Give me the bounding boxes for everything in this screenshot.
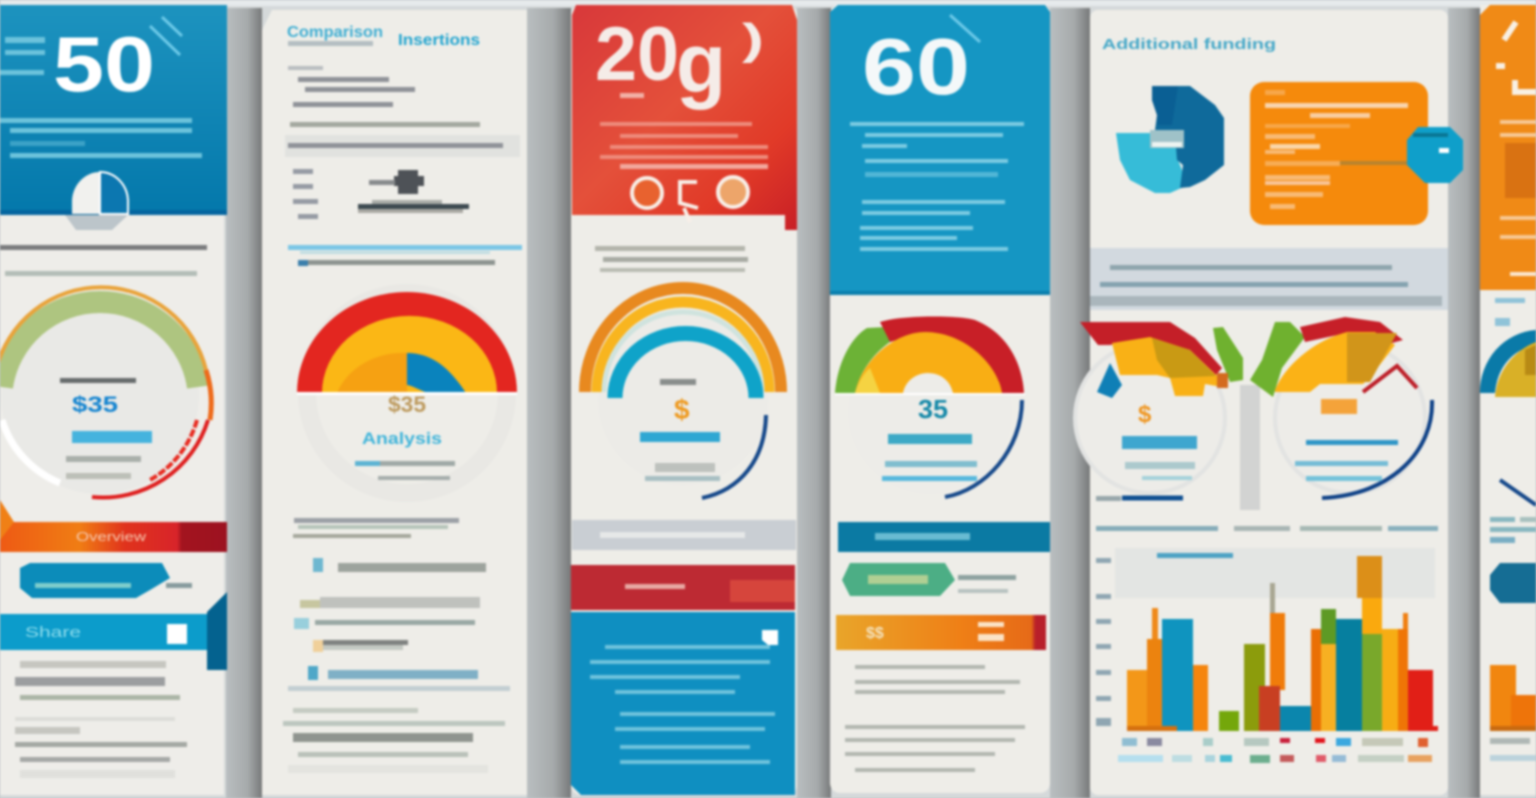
big number: 50 [53,20,155,108]
icon: half circle [65,172,128,230]
footer lines [590,645,775,764]
panel: column 4 [830,5,1050,793]
section divider blue [288,245,522,266]
gauge caption [640,432,720,442]
text line [288,143,503,148]
grey band with lines [1090,248,1448,310]
gauge value: $ [1138,401,1152,428]
header: blue block [0,5,227,215]
gauge value: 35 [918,394,948,424]
gauge [835,316,1025,497]
text lines [1490,517,1536,543]
grey strip [285,135,520,157]
gauge value [1321,399,1357,414]
bars [1147,639,1162,731]
divider between gauges [1240,385,1260,510]
banner: orange red: Overview [76,529,147,544]
gauge: partial [1480,330,1536,505]
panel: column 6 [1480,5,1536,795]
gauge: rings [585,288,781,498]
connector [1340,161,1410,165]
callout: orange [1250,82,1463,225]
bar chart [1096,548,1438,763]
big number: 60 [862,22,970,111]
gauge caption [888,434,972,444]
panel: column 2: Insertions [398,32,480,49]
chart: pie [1116,86,1224,193]
darker header block [1505,143,1536,198]
banner: orange red [0,500,227,552]
banner: red [571,565,795,610]
banner: blue [838,522,1050,552]
chart: small silhouette [293,169,469,219]
header lines [1500,120,1536,276]
list items [288,558,510,691]
big year: g [676,16,726,110]
gauge value: $ [674,394,690,425]
x axis labels row 1 [1122,738,1428,747]
icon: blue circle [1407,127,1463,183]
gauge: left [1075,322,1243,501]
panel: column 1 [0,5,227,795]
header lines [850,122,1024,251]
gauge caption: Analysis [362,429,442,448]
gauge: right [1250,317,1432,498]
heading: Additional funding [1102,36,1276,53]
icon: signal [150,17,182,55]
text lines [293,518,459,538]
text lines [288,41,480,127]
top page strip [0,0,1536,6]
footer: blue [571,612,795,795]
gauge: rainbow [297,292,517,493]
header lines [600,93,768,169]
gauge caption [1306,440,1398,445]
axis labels [1096,558,1111,726]
pill: blue [1490,563,1536,603]
panel: column 2 [262,10,527,795]
big year [595,12,764,110]
pill: blue [20,563,192,598]
banner: blue [0,592,227,670]
text lines [1495,298,1525,326]
icon: note [762,630,778,645]
icon: signal [950,15,980,42]
divider lines [1096,526,1438,531]
text lines [595,246,748,272]
header: orange [1480,5,1536,290]
pill: green [842,563,1016,596]
x axis labels row 2 [1118,755,1432,763]
panel: column 5 [1075,10,1463,795]
description lines [0,245,207,250]
gauge title [60,378,136,383]
gauge value: $35 [388,392,426,417]
header icons [632,177,748,222]
banner: orange: $$ [866,625,884,642]
header: red [572,5,797,230]
banner: blue: Share [25,624,81,641]
text block lines [15,661,187,778]
header text lines [0,37,202,158]
gauge caption [72,431,152,443]
bar chart: partial [1490,665,1536,761]
header labels: Comparison [287,24,383,41]
gauge caption [1122,436,1197,449]
grey band [572,520,796,550]
gauge: ring [0,287,211,498]
text lines [845,665,1025,772]
big year: ) [742,15,764,64]
gauge value: $35 [72,392,118,417]
gauge title [660,379,696,385]
footer text lines [283,708,505,773]
banner: orange [836,615,1046,650]
big year: 20 [595,12,679,97]
panel: column 3 [571,5,797,795]
header mark [1496,22,1536,92]
header: blue [830,5,1050,295]
